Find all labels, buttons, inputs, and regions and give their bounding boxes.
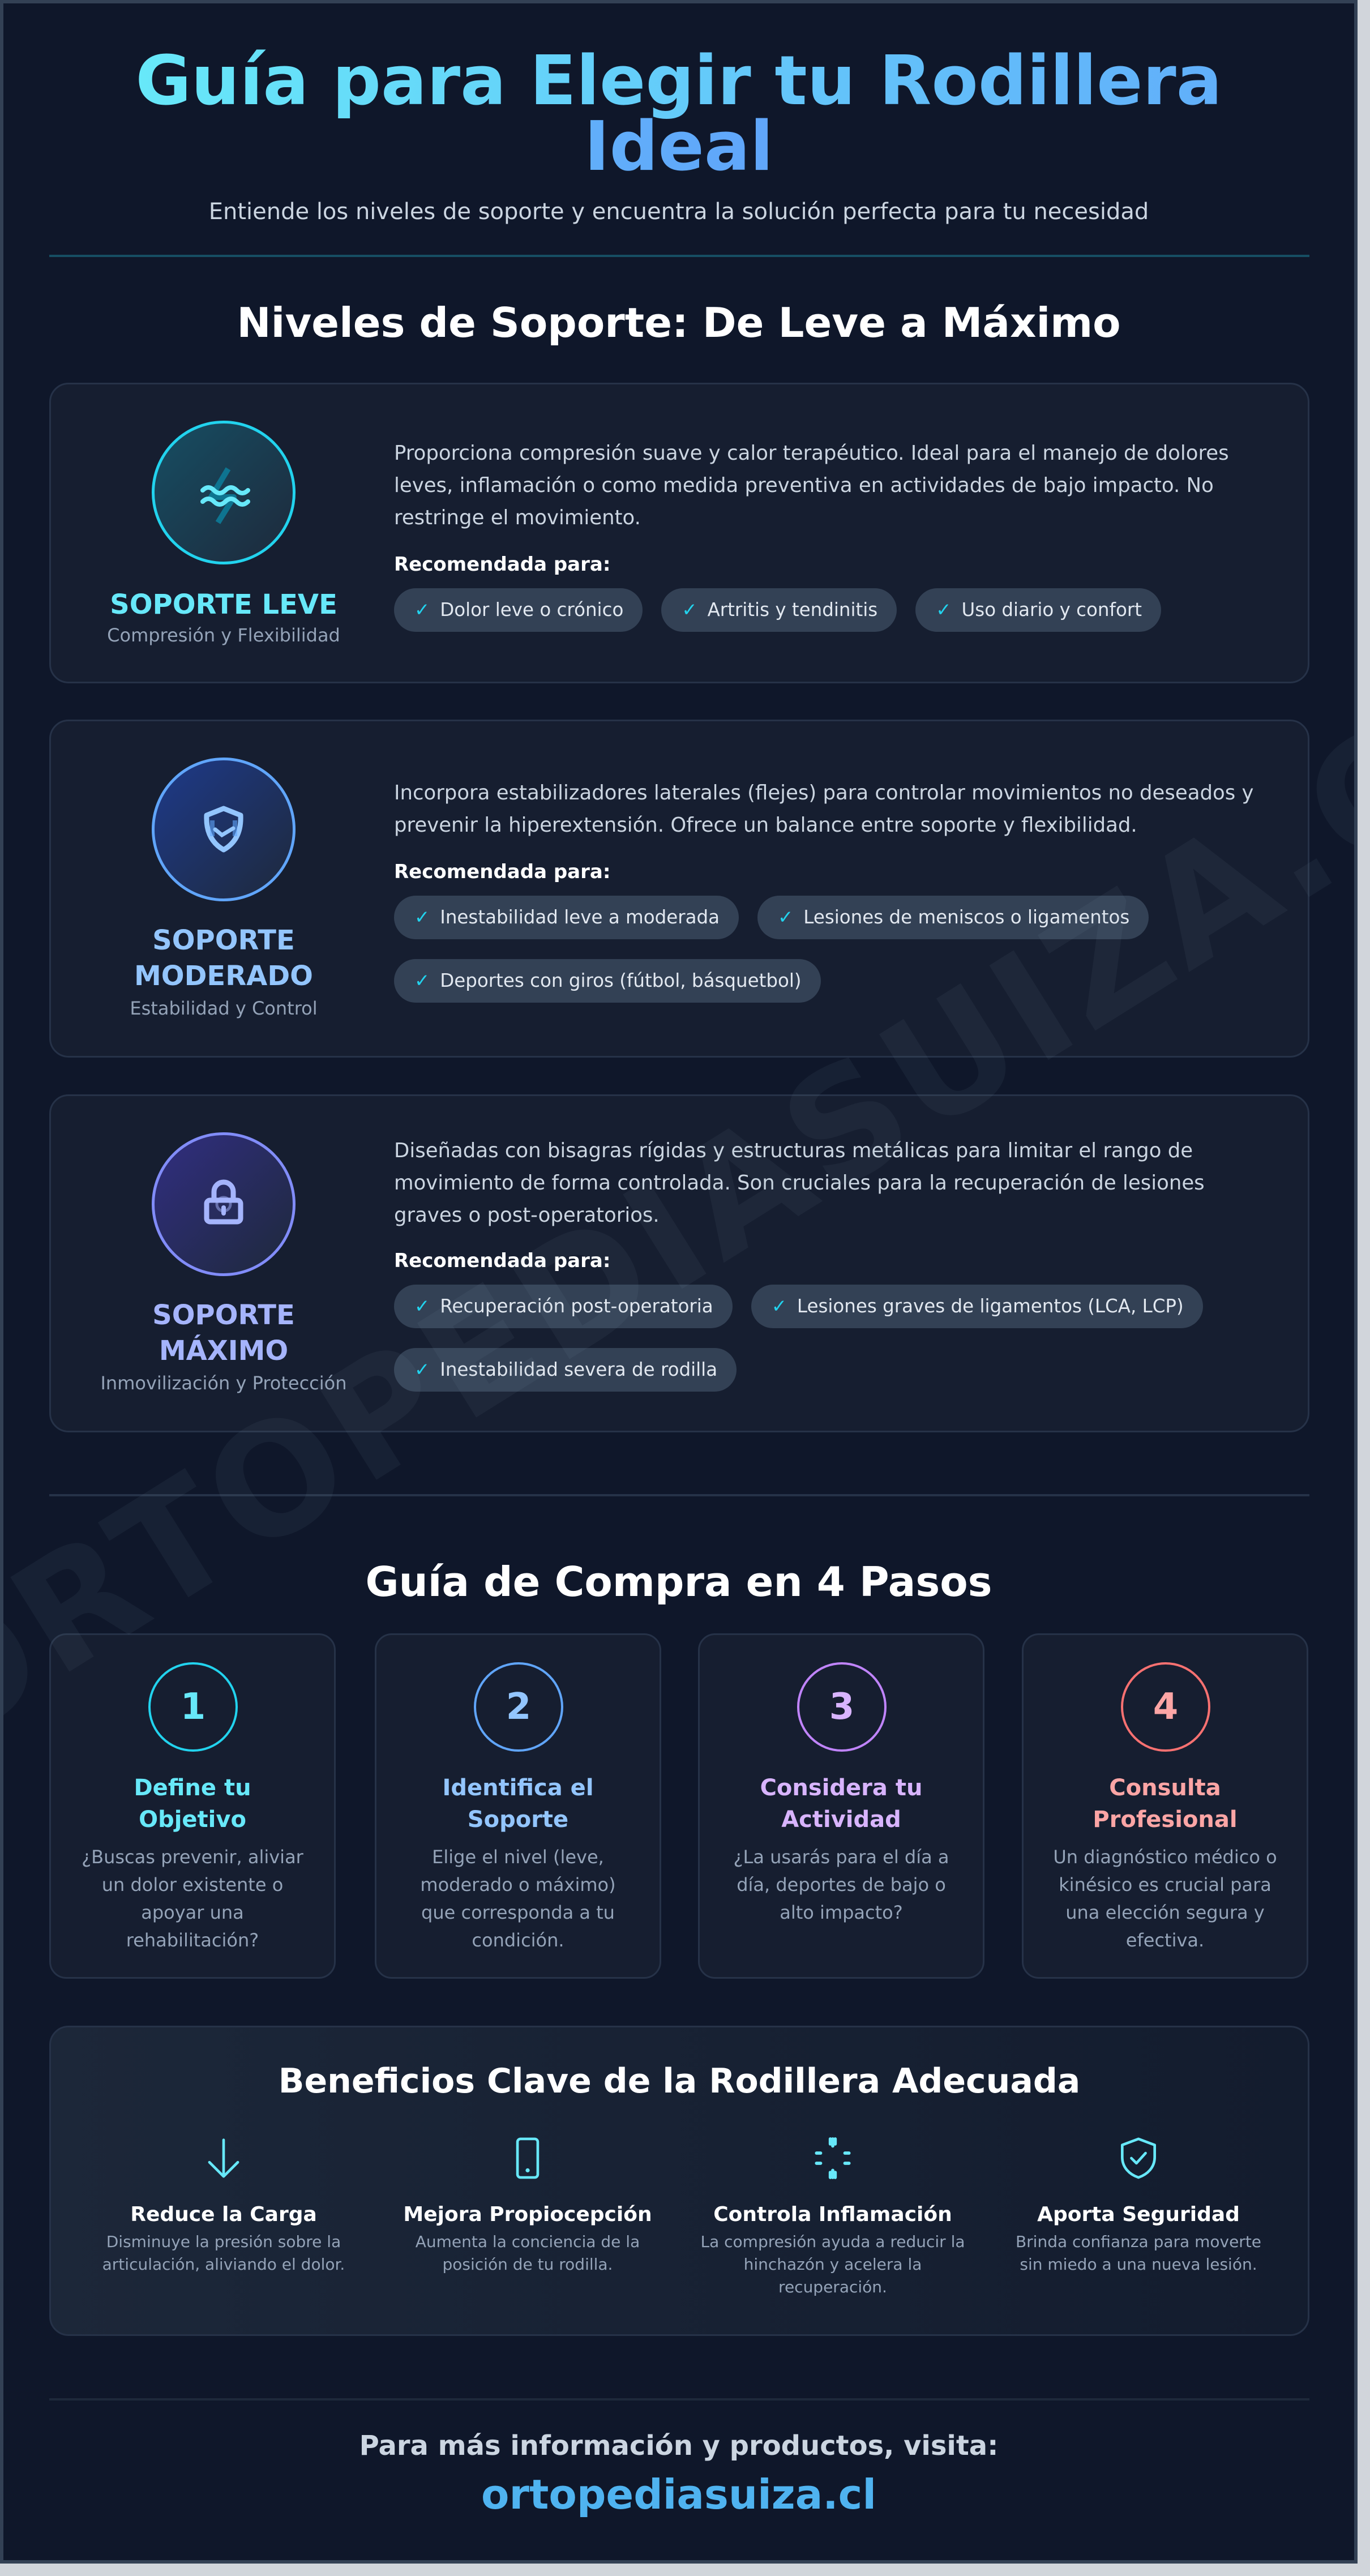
footer: Para más información y productos, visita: <box>359 2430 998 2462</box>
step 2: Identifica el <box>442 1775 594 1801</box>
heading: guia de compra: Guía de Compra en 4 Pasos <box>365 1558 992 1606</box>
panel: beneficios <box>49 2026 1309 2336</box>
benefit 4: Aporta Seguridad <box>1037 2203 1240 2226</box>
chips <box>394 588 1161 632</box>
chips: ✓ Dolor leve o crónico <box>414 599 623 621</box>
panel: soporte leve: Recomendada para: <box>394 553 610 576</box>
chips: ✓ Inestabilidad severa de rodilla <box>414 1359 717 1380</box>
panel: soporte maximo <box>49 1094 1309 1432</box>
benefit 2 <box>403 2138 652 2274</box>
step 3: Considera tu <box>760 1775 922 1801</box>
icon: lock <box>152 1132 296 1276</box>
chips: ✓ Lesiones graves de ligamentos (LCA, LCP) <box>772 1295 1184 1317</box>
chips <box>394 896 1149 1003</box>
level title: SOPORTE <box>152 1299 295 1331</box>
chips: ✓ Inestabilidad leve a moderada <box>414 906 720 928</box>
chips: ✓ Recuperación post-operatoria <box>414 1295 713 1317</box>
heading: niveles: Niveles de Soporte: De Leve a Máximo <box>237 299 1121 346</box>
heading: Beneficios Clave de la Rodillera Adecuada <box>279 2061 1080 2101</box>
step 3: ¿La usarás para el día a día, deportes de bajo o alto impacto? <box>734 1846 949 1923</box>
title: Ideal <box>584 108 773 186</box>
description: Diseñadas con bisagras rígidas y estructuras metálicas para limitar el rango de movimiento de forma controlada. Son cruciales para la recuperación de lesiones graves o post-operatorios. <box>394 1139 1205 1227</box>
step 4: Profesional <box>1093 1807 1238 1833</box>
level title: SOPORTE LEVE <box>110 589 337 621</box>
step 2: 2 <box>506 1686 531 1728</box>
panel: soporte maximo: Recomendada para: <box>394 1250 610 1272</box>
step 1 <box>49 1633 336 1979</box>
benefit 3: hinchazón y acelera la <box>744 2255 922 2274</box>
benefit 1: articulación, aliviando el dolor. <box>102 2255 345 2274</box>
chips: ✓ Uso diario y confort <box>936 599 1142 621</box>
step 2 <box>375 1633 661 1979</box>
step 4: Consulta <box>1109 1775 1221 1801</box>
step 1: Objetivo <box>139 1807 246 1833</box>
benefit 3: Controla Inflamación <box>713 2203 952 2226</box>
chips: ✓ Deportes con giros (fútbol, básquetbol) <box>414 970 802 991</box>
step 3 <box>698 1633 984 1979</box>
footer <box>359 2430 998 2518</box>
panel: soporte maximo: Inmovilización y Protección <box>100 1372 347 1394</box>
panel: soporte leve: Compresión y Flexibilidad <box>107 624 340 646</box>
step 2: Soporte <box>468 1807 568 1833</box>
icon: leve <box>152 421 296 564</box>
description: Incorpora estabilizadores laterales (flejes) para controlar movimientos no deseados y prevenir la hiperextensión. Ofrece un balance entre soporte y flexibilidad. <box>394 781 1253 837</box>
level title: SOPORTE <box>152 925 295 956</box>
title <box>135 42 1222 186</box>
level title <box>152 1299 295 1367</box>
step 2: Elige el nivel (leve, moderado o máximo) que corresponda a tu condición. <box>420 1846 616 1951</box>
panel: soporte moderado: Estabilidad y Control <box>130 998 318 1019</box>
chips: ✓ Artritis y tendinitis <box>682 599 877 621</box>
step 3: Actividad <box>781 1807 901 1833</box>
benefit 1: Disminuye la presión sobre la <box>106 2232 341 2251</box>
benefit 1 <box>102 2138 345 2274</box>
step 4: Un diagnóstico médico o kinésico es crucial para una elección segura y efectiva. <box>1053 1846 1277 1951</box>
step 1: ¿Buscas prevenir, aliviar un dolor existente o apoyar una rehabilitación? <box>82 1846 303 1951</box>
level title: MÁXIMO <box>159 1335 288 1367</box>
step 1: Define tu <box>134 1775 251 1801</box>
benefit 1: Reduce la Carga <box>130 2203 317 2226</box>
benefit 2: posición de tu rodilla. <box>443 2255 613 2274</box>
subtitle: Entiende los niveles de soporte y encuentra la solución perfecta para tu necesidad <box>209 199 1149 225</box>
footer: ortopediasuiza.cl <box>481 2471 876 2518</box>
step 4: 4 <box>1153 1686 1178 1728</box>
benefit 4: sin miedo a una nueva lesión. <box>1020 2255 1257 2274</box>
benefit 2: Aumenta la conciencia de la <box>416 2232 640 2251</box>
chips <box>394 1285 1203 1392</box>
benefit 2: Mejora Propiocepción <box>403 2203 652 2226</box>
benefit 4 <box>1016 2138 1261 2274</box>
step 4 <box>1022 1633 1308 1979</box>
panel: soporte leve <box>49 383 1309 683</box>
panel: soporte moderado <box>49 720 1309 1058</box>
step 3: 3 <box>829 1686 854 1728</box>
benefit 4: Brinda confianza para moverte <box>1016 2232 1261 2251</box>
title: Guía para Elegir tu Rodillera <box>135 42 1222 121</box>
chips: ✓ Lesiones de meniscos o ligamentos <box>778 906 1129 928</box>
level title: MODERADO <box>134 960 313 992</box>
benefit 3 <box>700 2137 965 2296</box>
description: Proporciona compresión suave y calor terapéutico. Ideal para el manejo de dolores leves, inflamación o como medida preventiva en actividades de bajo impacto. No restringe el movimiento. <box>394 442 1229 529</box>
benefit 3: recuperación. <box>778 2278 887 2296</box>
step 1: 1 <box>181 1686 206 1728</box>
benefit 3: La compresión ayuda a reducir la <box>700 2232 965 2251</box>
icon: shield <box>152 758 296 901</box>
panel: soporte moderado: Recomendada para: <box>394 861 610 883</box>
level title <box>134 925 313 992</box>
